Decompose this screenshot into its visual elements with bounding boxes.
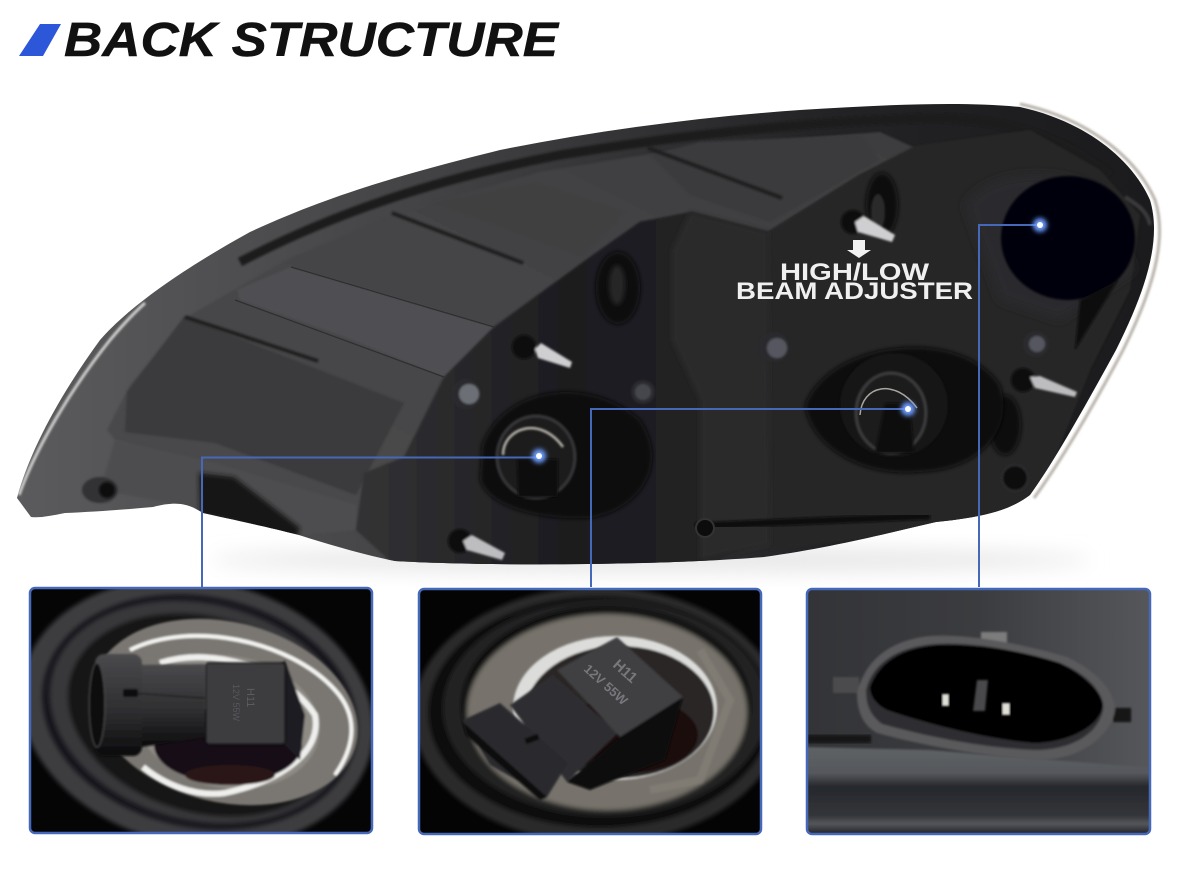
label text: HIGH/LOW bbox=[780, 259, 929, 286]
callout line: left low beam bbox=[202, 449, 546, 587]
lamp body bbox=[0, 90, 1180, 580]
label: high/low beam adjuster: BEAM ADJUSTER bbox=[736, 278, 973, 305]
callout line: center low beam bbox=[591, 402, 915, 587]
callout line: high beam bbox=[979, 218, 1047, 587]
lower strap bbox=[695, 516, 930, 526]
socket gasket bbox=[857, 636, 1115, 760]
pins bbox=[942, 694, 949, 706]
panel: upper textured vent bbox=[433, 183, 625, 257]
adjuster screws bbox=[448, 210, 1077, 560]
title: back structure bbox=[19, 14, 560, 67]
panel: lower textured vent bbox=[125, 317, 404, 495]
lower bar bbox=[806, 747, 1151, 835]
bottom dark clip bbox=[199, 473, 300, 540]
lower right recess bbox=[989, 395, 1021, 455]
face of the right module bbox=[768, 130, 1140, 550]
text: H11 12V 55W marking: H11 bbox=[609, 656, 641, 687]
connector body bbox=[89, 654, 285, 756]
grey nubs bbox=[451, 331, 1049, 409]
face of the left module bbox=[356, 212, 718, 564]
ground shadow bbox=[210, 548, 1090, 572]
left low beam socket bbox=[480, 392, 652, 518]
icon: blue slanted bar bbox=[19, 24, 61, 56]
pillar between modules bbox=[672, 212, 770, 560]
text: H11 12V 55W marking: 12V 55W bbox=[581, 661, 631, 708]
panel: center bulb connector close-up bbox=[413, 587, 783, 843]
ribs bbox=[185, 148, 782, 361]
panel: middle vent bbox=[237, 267, 494, 377]
center low beam socket bbox=[805, 347, 1003, 473]
top dark groove bbox=[237, 114, 926, 267]
left outer lip bbox=[19, 303, 145, 495]
connector body bbox=[463, 637, 683, 800]
socket opening bbox=[870, 645, 1103, 743]
recesses bbox=[596, 252, 640, 324]
heading text: BACK STRUCTURE bbox=[64, 14, 560, 67]
panel: left bulb connector close-up bbox=[28, 586, 374, 834]
mounting hole left bbox=[82, 477, 118, 503]
right high beam socket bbox=[965, 175, 1150, 350]
label: high/low beam adjuster bbox=[736, 240, 973, 305]
bottom skirt bbox=[106, 444, 302, 536]
headlight rear view photo illustration bbox=[0, 90, 1180, 580]
socket tabs bbox=[981, 632, 1007, 644]
panel: left bulb connector close-up: 12V 55W bbox=[231, 684, 241, 722]
panel: roof vent bbox=[670, 137, 814, 151]
side wall of housing bbox=[108, 132, 912, 454]
icon: down arrow bbox=[847, 240, 871, 258]
lamp clear lens rim bbox=[1020, 104, 1160, 498]
panel: high beam socket close-up bbox=[806, 588, 1151, 835]
text: moulded marking on connector: H11 bbox=[244, 688, 256, 707]
mounting hole right bbox=[1003, 466, 1027, 490]
